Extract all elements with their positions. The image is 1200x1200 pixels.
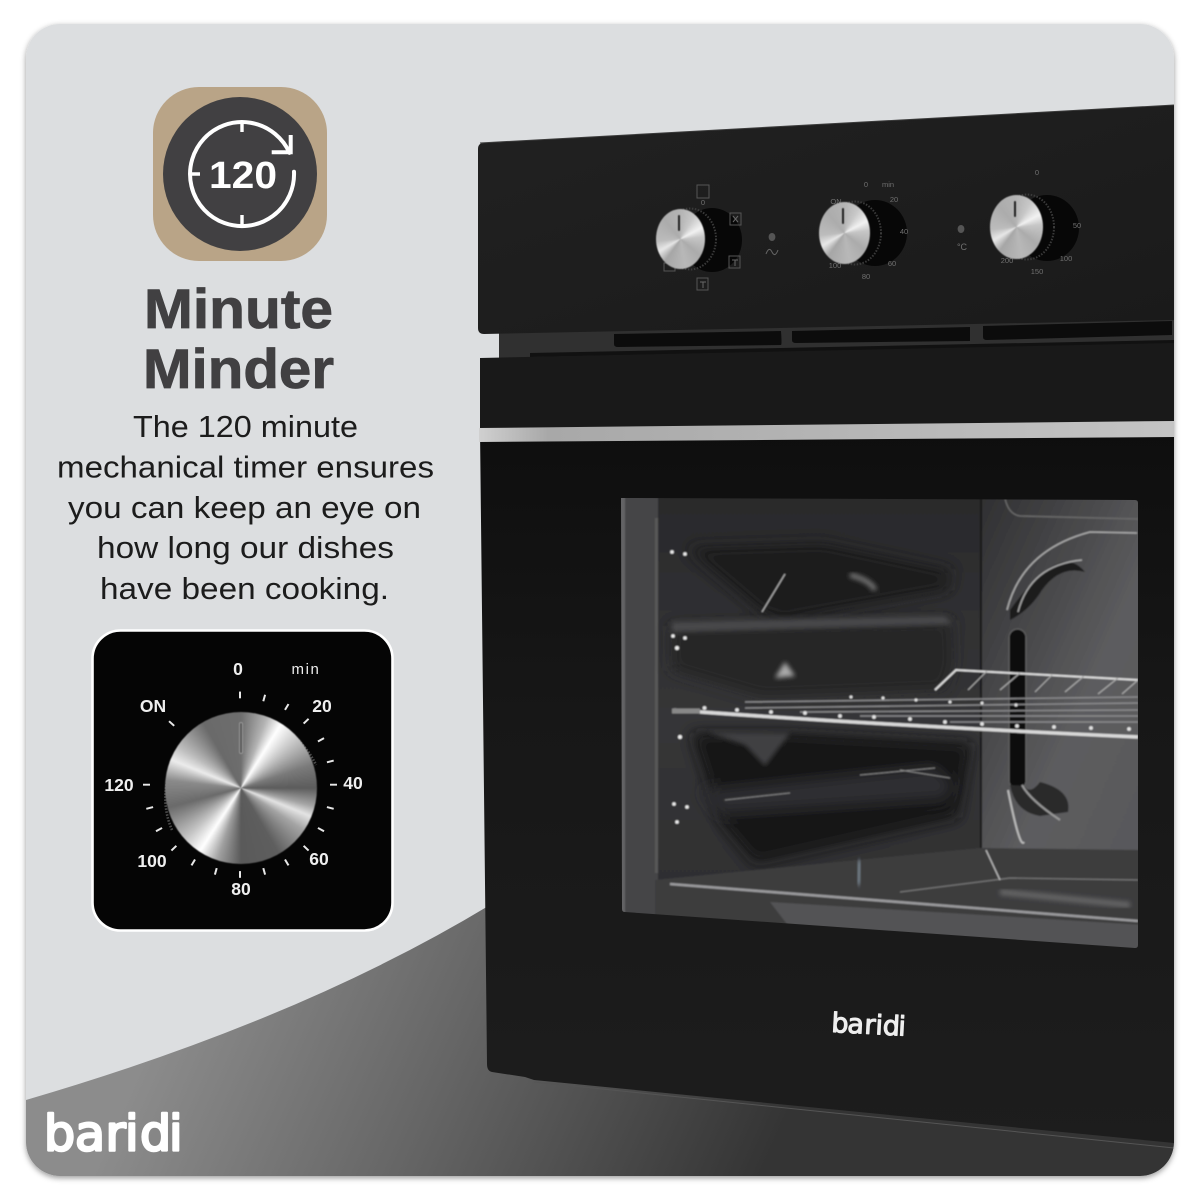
oven knob 3: [990, 195, 1043, 259]
oven floor tray: [655, 848, 1145, 955]
highlight dots: [670, 550, 689, 824]
knob 1 body: [682, 208, 742, 272]
oven upper door band: [480, 343, 1174, 430]
right wall: [980, 490, 1145, 860]
panel scale labels: 100: [829, 261, 841, 270]
oven control panel: [478, 105, 1174, 334]
body text: [57, 409, 434, 606]
door logo: baridi: [831, 1008, 907, 1043]
body text: have been cooking.: [100, 571, 389, 606]
panel scale labels: 50: [1073, 221, 1081, 230]
panel scale labels: 150: [1031, 267, 1043, 276]
body text: mechanical timer ensures: [57, 450, 434, 484]
left door edge: [621, 498, 659, 914]
app icon: 120 minute timer: [153, 87, 327, 261]
knob 3 body: [1018, 194, 1079, 261]
body text: The 120 minute: [133, 409, 358, 444]
wire rack: [672, 670, 1138, 737]
timer scale labels: 0: [233, 659, 243, 679]
side wall ridges: [671, 543, 972, 863]
panel scale labels: ON: [830, 197, 842, 206]
heading: Minute: [144, 277, 333, 340]
panel scale labels: 20: [890, 195, 898, 204]
heading: Minder: [143, 337, 334, 400]
panel scale labels: 0: [701, 198, 705, 207]
indicator lights: [766, 225, 964, 255]
timer scale labels: 20: [312, 696, 332, 716]
panel scale labels: °C: [957, 242, 968, 252]
timer scale labels: ON: [140, 696, 166, 716]
oven: [478, 105, 1174, 1148]
oven door: [480, 424, 1174, 1143]
panel scale labels: 0: [864, 180, 868, 189]
corner logo: baridi: [44, 1106, 183, 1162]
floor swoosh: [26, 905, 1174, 1176]
timer scale labels: [104, 659, 363, 899]
app icon: 120 minute timer: 120: [209, 155, 277, 197]
oven knob 2: [819, 202, 870, 264]
knob 1 pointer: [678, 215, 680, 231]
knob 2 body: [848, 200, 907, 266]
panel scale labels: min: [882, 180, 894, 189]
panel scale labels: 80: [862, 272, 870, 281]
panel scale labels: 100: [1060, 254, 1072, 263]
knob pointer: [239, 722, 243, 754]
door bottom edge: [616, 1090, 1174, 1148]
wall slot: [1009, 629, 1026, 789]
body text: how long our dishes: [97, 530, 394, 565]
timer ticks: [143, 692, 337, 878]
vent gap under panel: [499, 320, 1174, 358]
oven knob 1: [656, 209, 705, 269]
oven window: [615, 490, 1145, 955]
panel scale labels: 60: [888, 259, 896, 268]
panel scale labels: 200: [1001, 256, 1013, 265]
timer scale labels: 100: [137, 851, 167, 871]
function selector symbols: [664, 185, 741, 290]
timer scale labels: 120: [104, 775, 134, 795]
panel scale labels: 0: [1035, 168, 1039, 177]
knob 3 pointer: [1014, 201, 1016, 217]
rack bead highlights: [703, 696, 1131, 731]
back wall: [658, 498, 981, 880]
timer scale labels: 40: [343, 773, 363, 793]
timer scale labels: 80: [231, 879, 251, 899]
body text: you can keep an eye on: [68, 490, 421, 525]
timer scale labels: min: [292, 661, 320, 678]
chrome door strip: [479, 421, 1174, 442]
heading: [143, 277, 334, 400]
wall arch: [1007, 532, 1137, 620]
panel scale labels: 40: [900, 227, 908, 236]
timer knob rim: [165, 719, 316, 830]
timer knob: [165, 712, 317, 864]
panel scale labels: [701, 168, 1081, 281]
knob 2 pointer: [842, 208, 844, 224]
wall hook: [1008, 782, 1068, 843]
timer scale labels: 60: [309, 849, 329, 869]
timer close-up panel: [92, 630, 392, 930]
